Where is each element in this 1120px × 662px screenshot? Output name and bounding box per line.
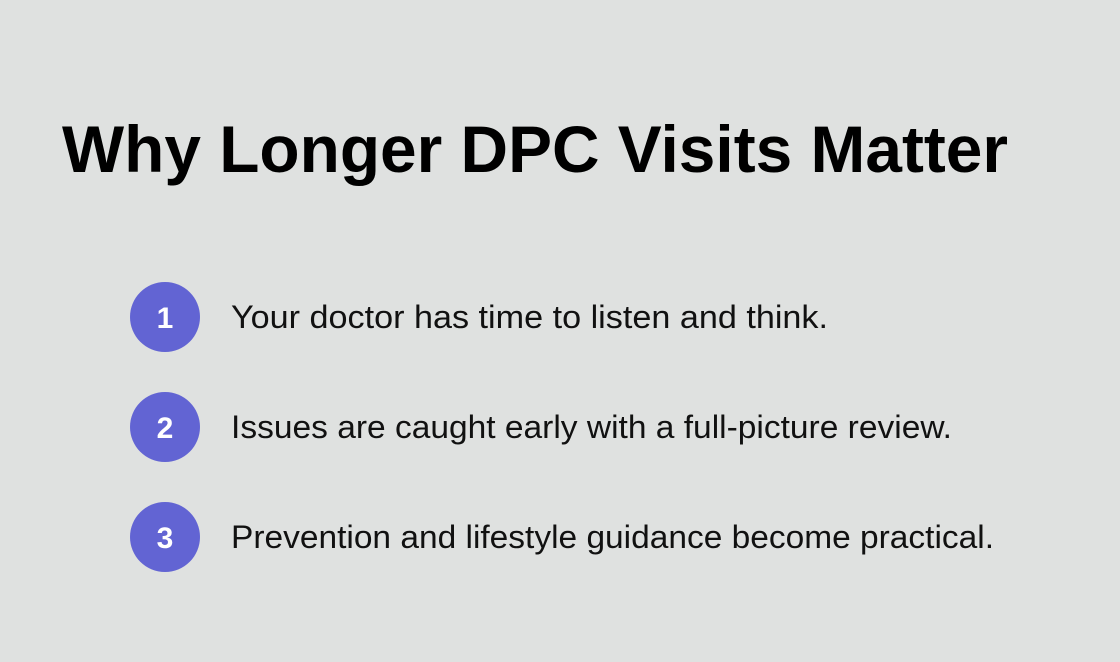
title: Why Longer DPC Visits Matter xyxy=(62,112,1008,186)
icon: number 2 circle: 2 xyxy=(157,412,173,445)
text: item 2: Issues are caught early with a full-picture review. xyxy=(231,409,952,445)
text: item 1: Your doctor has time to listen and think. xyxy=(231,299,828,335)
icon: number 2 circle xyxy=(130,392,200,462)
icon: number 1 circle: 1 xyxy=(157,302,173,335)
item 2 xyxy=(130,392,952,462)
icon: number 1 circle xyxy=(130,282,200,352)
icon: number 3 circle: 3 xyxy=(157,522,173,555)
item 3 xyxy=(130,502,994,572)
text: item 3: Prevention and lifestyle guidance become practical. xyxy=(231,519,994,555)
icon: number 3 circle xyxy=(130,502,200,572)
item 1 xyxy=(130,282,828,352)
